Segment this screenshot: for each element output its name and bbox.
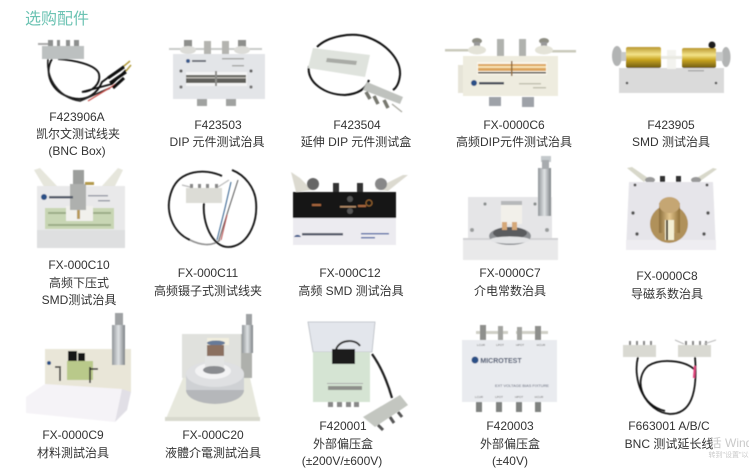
product image: external bias box 40V: MICROTEST xyxy=(480,358,522,365)
item: FX-0000C7 xyxy=(463,156,558,298)
caption: BNC 测试延长线 xyxy=(625,436,713,451)
product image: external bias box 600V xyxy=(308,322,408,430)
product image: BNC extension cable xyxy=(623,340,716,414)
caption: 高频DIP元件测试治具 xyxy=(456,134,572,149)
product image: down-press SMD fixture xyxy=(34,168,125,248)
product image: external bias box 40V: LPOT xyxy=(496,343,504,347)
product image: magnetic permeability fixture xyxy=(626,167,717,250)
product image: external bias box 40V xyxy=(462,325,557,412)
caption: F663001 A/B/C xyxy=(628,419,710,433)
product image: Kelvin clip leads xyxy=(38,40,131,101)
product image: external bias box 40V: EXT VOLTAGE BIAS FIXTURE xyxy=(495,383,549,388)
caption: FX-0000C9 xyxy=(42,428,104,442)
product image: external bias box 40V: LCUR xyxy=(475,395,484,399)
caption: FX-0000C6 xyxy=(483,118,545,132)
caption: FX-000C20 xyxy=(182,428,244,442)
caption: 凯尔文测试线夹 xyxy=(36,126,120,141)
product image: external bias box 40V: LPOT xyxy=(495,395,503,399)
item: F423905 xyxy=(612,42,730,149)
caption: 外部偏压盒 xyxy=(480,436,540,451)
caption: F423905 xyxy=(647,118,695,132)
item: FX-0000C9 xyxy=(26,313,131,460)
caption: FX-0000C7 xyxy=(479,266,541,280)
product image: external bias box 40V: HPOT xyxy=(516,343,524,347)
item: F423504 xyxy=(301,35,411,149)
item: FX-000C12 xyxy=(291,172,408,298)
caption xyxy=(169,118,265,149)
product image: tweezer test leads xyxy=(169,170,256,247)
caption: 材料測試治具 xyxy=(37,445,109,460)
watermark xyxy=(709,436,749,459)
caption xyxy=(37,428,109,460)
item: F420001 xyxy=(302,322,408,468)
caption: DIP 元件测试治具 xyxy=(169,134,265,149)
caption: F423504 xyxy=(333,118,381,132)
caption: (±40V) xyxy=(492,454,528,468)
caption: SMD测试治具 xyxy=(42,292,116,307)
caption xyxy=(165,428,261,460)
product image: high frequency SMD fixture xyxy=(291,172,408,245)
caption: FX-0000C8 xyxy=(636,269,698,283)
item: F663001 xyxy=(623,340,716,451)
item: FX-000C11 xyxy=(154,170,262,298)
caption xyxy=(480,419,540,468)
title: 选购配件 xyxy=(25,10,89,28)
caption: FX-000C11 xyxy=(178,266,239,280)
caption: F423906A xyxy=(49,110,105,124)
caption xyxy=(301,118,411,149)
item: FX-0000C6 xyxy=(445,38,576,149)
product image: DIP fixture xyxy=(169,40,265,106)
product image: high frequency DIP fixture xyxy=(445,38,576,107)
item: F423906A xyxy=(36,40,131,158)
item: F423503 xyxy=(169,40,265,149)
caption: 高频镊子式测试线夹 xyxy=(154,283,262,298)
caption: 延伸 DIP 元件测试盒 xyxy=(301,134,411,149)
product image: external bias box 40V: LCUR xyxy=(477,343,486,347)
product image: external bias box 40V: HCUR xyxy=(537,343,546,347)
caption: (±200V/±600V) xyxy=(302,454,382,468)
product image: liquid dielectric fixture xyxy=(165,314,260,421)
caption xyxy=(154,266,262,298)
caption: 高频 SMD 测试治具 xyxy=(298,283,404,298)
caption xyxy=(456,118,572,149)
caption xyxy=(298,266,404,298)
caption: 液體介電測試治具 xyxy=(165,445,261,460)
caption: FX-000C10 xyxy=(48,258,110,272)
caption xyxy=(302,419,382,468)
caption: F420003 xyxy=(486,419,534,433)
product image: material test fixture xyxy=(26,313,131,422)
caption xyxy=(474,266,546,298)
caption xyxy=(631,269,703,301)
item: FX-000C10 xyxy=(34,168,125,307)
caption xyxy=(42,258,116,307)
caption: 外部偏压盒 xyxy=(313,436,373,451)
caption: 高频下压式 xyxy=(49,275,109,290)
caption: F423503 xyxy=(194,118,242,132)
product image: SMD fixture xyxy=(612,42,730,93)
item: F420003 xyxy=(462,325,557,468)
item: FX-000C20 xyxy=(165,314,261,460)
caption: F420001 xyxy=(319,419,367,433)
item: FX-0000C8 xyxy=(626,167,717,301)
product image: external bias box 40V: HCUR xyxy=(535,395,544,399)
caption xyxy=(625,419,713,451)
product image: dielectric constant fixture xyxy=(463,156,558,260)
caption: (BNC Box) xyxy=(48,144,106,158)
caption: 介电常数治具 xyxy=(474,283,546,298)
caption: 导磁系数治具 xyxy=(631,286,703,301)
caption xyxy=(36,110,120,158)
caption: FX-000C12 xyxy=(319,266,381,280)
product image: extended DIP box xyxy=(308,35,403,112)
product image: external bias box 40V: HPOT xyxy=(515,395,523,399)
caption xyxy=(632,118,710,149)
caption: SMD 测试治具 xyxy=(632,134,710,149)
